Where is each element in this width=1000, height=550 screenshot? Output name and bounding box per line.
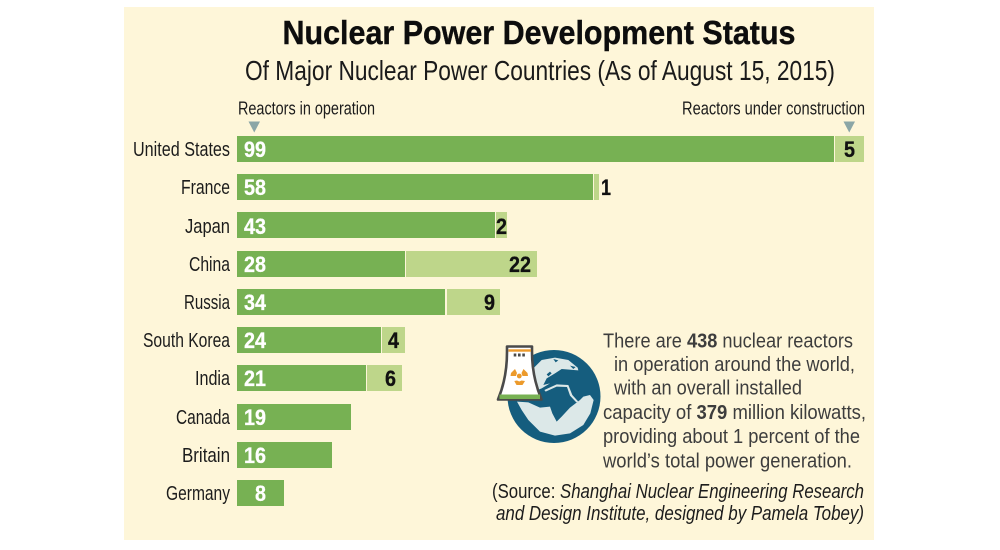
legend: reactors under construction: [682, 98, 865, 132]
row: United States: [133, 136, 864, 162]
subtitle: Of Major Nuclear Power Countries (As of August 15, 2015): [245, 55, 835, 86]
row: France: 58: [244, 175, 266, 200]
text block: world statistics: [602, 330, 866, 472]
icon: globe with cooling tower: [498, 346, 600, 443]
row: United States: 5: [844, 137, 855, 162]
row: Canada: Canada: [176, 407, 231, 429]
row: Japan: 2: [496, 214, 507, 239]
source note: and Design Institute, designed by Pamela Tobey): [496, 503, 864, 525]
row: Russia: 34: [244, 290, 267, 315]
row: China: 28: [244, 252, 266, 277]
row: Russia: 9: [484, 290, 495, 315]
row: United States: United States: [133, 139, 230, 161]
row: Germany: 8: [255, 481, 266, 506]
text block: world statistics: with an overall installed: [613, 378, 802, 400]
row: France: [181, 174, 611, 200]
row: South Korea: [143, 327, 405, 353]
legend: reactors in operation: Reactors in operation: [238, 98, 375, 118]
row: India: 6: [385, 366, 396, 391]
row: France: France: [181, 177, 230, 199]
bar chart: [133, 136, 864, 506]
source note: [492, 481, 864, 525]
row: Russia: Russia: [184, 292, 231, 314]
row: South Korea: 24: [244, 328, 267, 353]
row: India: 21: [244, 366, 266, 391]
row: Britain: Britain: [182, 445, 230, 467]
text block: world statistics: world’s total power generation.: [602, 450, 852, 472]
row: South Korea: South Korea: [143, 330, 231, 352]
row: Japan: 43: [244, 214, 266, 239]
legend: reactors under construction: Reactors under construction: [682, 98, 865, 118]
row: Canada: 19: [244, 405, 266, 430]
source note: (Source: Shanghai Nuclear Engineering Research: [492, 481, 864, 503]
row: China: China: [189, 254, 231, 276]
row: France: 1: [601, 175, 611, 200]
text block: world statistics: There are 438 nuclear reactors: [603, 330, 853, 352]
row: Germany: Germany: [166, 483, 230, 505]
row: Britain: [182, 442, 332, 468]
row: South Korea: 4: [388, 328, 400, 353]
legend: reactors in operation: [238, 98, 375, 132]
row: Russia: [184, 289, 500, 315]
text block: world statistics: in operation around the world,: [614, 354, 855, 376]
row: China: 22: [509, 252, 531, 277]
row: China: [189, 251, 537, 277]
row: United States: 99: [244, 137, 266, 162]
row: Japan: Japan: [185, 216, 230, 238]
row: Canada: [176, 404, 351, 430]
panel: background: [124, 7, 874, 540]
icon: cooling tower: [498, 346, 542, 400]
text block: world statistics: capacity of 379 million kilowatts,: [603, 402, 866, 424]
text block: world statistics: providing about 1 percent of the: [603, 426, 860, 448]
title: Nuclear Power Development Status: [282, 14, 796, 51]
row: India: [195, 365, 402, 391]
row: Japan: [185, 212, 507, 239]
row: India: India: [195, 368, 231, 390]
row: Germany: [166, 480, 284, 506]
row: Britain: 16: [244, 443, 266, 468]
